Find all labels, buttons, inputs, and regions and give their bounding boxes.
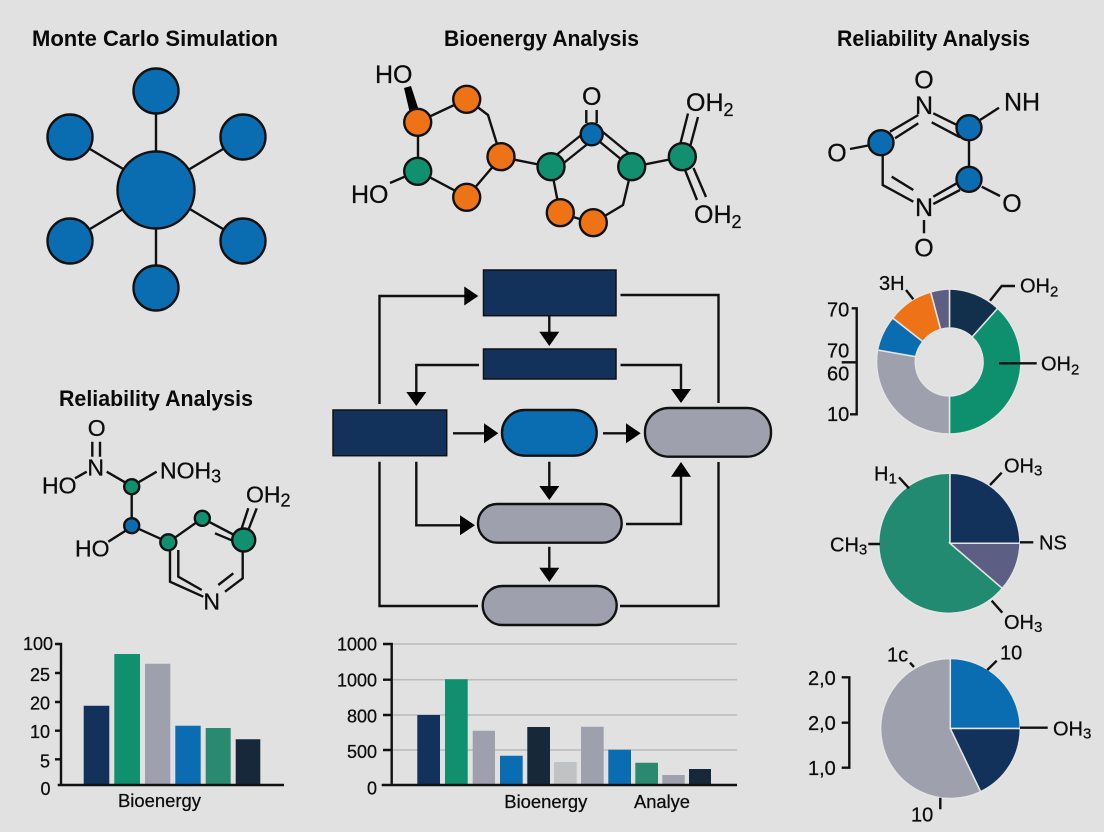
- arrowheads: [406, 286, 691, 582]
- donut labels and axis: 70: [827, 300, 849, 322]
- middle pie labels: OH: [1004, 456, 1034, 478]
- middle pie labels: CH: [830, 535, 859, 557]
- donut labels and axis: OH: [1041, 354, 1071, 376]
- donut labels and axis: 2: [1050, 284, 1058, 301]
- molecule: bioenergy: 2: [732, 212, 742, 232]
- molecule: bioenergy: OH: [686, 89, 724, 117]
- molecule: bioenergy: OH: [694, 201, 732, 229]
- donut chart: [877, 289, 1021, 434]
- donut labels and axis: 60: [827, 364, 849, 386]
- molecule: reliability (left): O: [88, 415, 106, 441]
- molecule: bioenergy: HO: [351, 181, 388, 209]
- bottom pie labels and axis: 1,0: [808, 758, 836, 780]
- pill: blue centre: [502, 410, 597, 456]
- bottom pie labels and axis: 10: [911, 805, 933, 827]
- donut labels and axis: 2: [1071, 362, 1079, 379]
- bar chart: centre: 1000: [337, 671, 377, 691]
- molecule: bioenergy: 2: [724, 100, 734, 120]
- title: Bioenergy Analysis: Bioenergy Analysis: [444, 26, 639, 51]
- molecule: reliability (left): N: [87, 455, 104, 481]
- bar chart: left: 25: [30, 665, 50, 685]
- donut labels and axis: OH: [1020, 276, 1050, 298]
- bottom pie labels and axis: OH: [1053, 719, 1083, 741]
- bottom pie labels and axis: 2,0: [808, 668, 836, 690]
- box: left rectangle: [333, 410, 447, 456]
- molecule: bioenergy: [351, 61, 742, 236]
- molecule: reliability (left): HO: [75, 536, 110, 562]
- bar chart: centre: 1000: [337, 635, 377, 655]
- bottom pie labels and axis: 2,0: [808, 713, 836, 735]
- donut labels and axis: 70: [827, 340, 849, 362]
- title: Reliability Analysis (left): Reliability Analysis: [59, 386, 253, 411]
- molecule: reliability (top right): NH: [1004, 89, 1040, 117]
- molecule: reliability (left): [42, 415, 291, 614]
- bar chart: centre: 0: [367, 778, 377, 798]
- middle pie labels: 3: [1034, 463, 1042, 480]
- network diagram: hub and spokes: [48, 68, 266, 310]
- molecule: reliability (top right): O: [1002, 190, 1022, 218]
- donut labels and axis: 10: [827, 404, 849, 426]
- donut labels and axis: [827, 273, 1079, 426]
- molecule: reliability (top right): O: [914, 66, 934, 94]
- middle pie labels: OH: [1004, 612, 1034, 634]
- donut labels and axis: 3H: [879, 273, 905, 295]
- molecule: reliability (top right): O: [827, 140, 847, 168]
- connector lines: [380, 295, 718, 606]
- molecule: reliability (top right): O: [914, 235, 934, 263]
- bar chart: left: 20: [30, 693, 50, 713]
- bottom pie labels and axis: 1c: [887, 645, 908, 667]
- middle pie labels: 1: [888, 471, 897, 488]
- title: Monte Carlo Simulation: Monte Carlo Simulation: [32, 26, 278, 51]
- molecule: reliability (top right): N: [915, 194, 933, 222]
- molecule: reliability (left): NOH: [160, 457, 211, 483]
- box: second rectangle: [484, 349, 616, 379]
- molecule: bioenergy: O: [582, 83, 601, 111]
- pie chart: bottom: [881, 658, 1020, 798]
- bottom pie labels and axis: [808, 642, 1091, 827]
- middle pie labels: 3: [1034, 619, 1042, 636]
- bar chart: left: Bioenergy: [118, 791, 201, 811]
- molecule: reliability (top right): N: [915, 92, 933, 120]
- bar chart: left: 100: [23, 634, 53, 654]
- pill: grey right: [645, 408, 771, 457]
- molecule: reliability (left): 3: [211, 466, 221, 486]
- pill: grey bottom: [483, 586, 617, 625]
- flowchart: [333, 270, 771, 625]
- bar chart: left: [23, 634, 284, 811]
- middle pie labels: H: [874, 464, 888, 486]
- pie chart: middle: [879, 473, 1020, 613]
- pill: grey middle: [478, 504, 622, 543]
- bar chart: left: 0: [40, 779, 50, 799]
- molecule: reliability (left): HO: [42, 472, 76, 498]
- bottom pie labels and axis: 10: [1000, 642, 1022, 664]
- middle pie labels: NS: [1039, 532, 1067, 554]
- bar chart: left: 5: [40, 752, 50, 772]
- molecule: reliability (left): 2: [280, 491, 291, 511]
- bar chart: centre: Analye: [634, 792, 690, 812]
- bar chart: centre: Bioenergy: [504, 792, 587, 812]
- bar chart: centre: 500: [347, 742, 377, 762]
- title: Reliability Analysis (right): Reliability Analysis: [837, 26, 1030, 51]
- bar chart: left: 10: [30, 722, 50, 742]
- molecule: reliability (left): N: [203, 588, 220, 614]
- bottom pie labels and axis: 3: [1083, 726, 1091, 743]
- middle pie labels: [830, 456, 1067, 636]
- bar chart: centre: 800: [347, 707, 377, 727]
- molecule: reliability (top right): [827, 66, 1040, 263]
- box: top rectangle: [484, 270, 616, 316]
- molecule: reliability (left): OH: [246, 482, 280, 508]
- bar chart: centre: [337, 635, 737, 812]
- molecule: bioenergy: HO: [375, 61, 412, 89]
- middle pie labels: 3: [859, 542, 867, 559]
